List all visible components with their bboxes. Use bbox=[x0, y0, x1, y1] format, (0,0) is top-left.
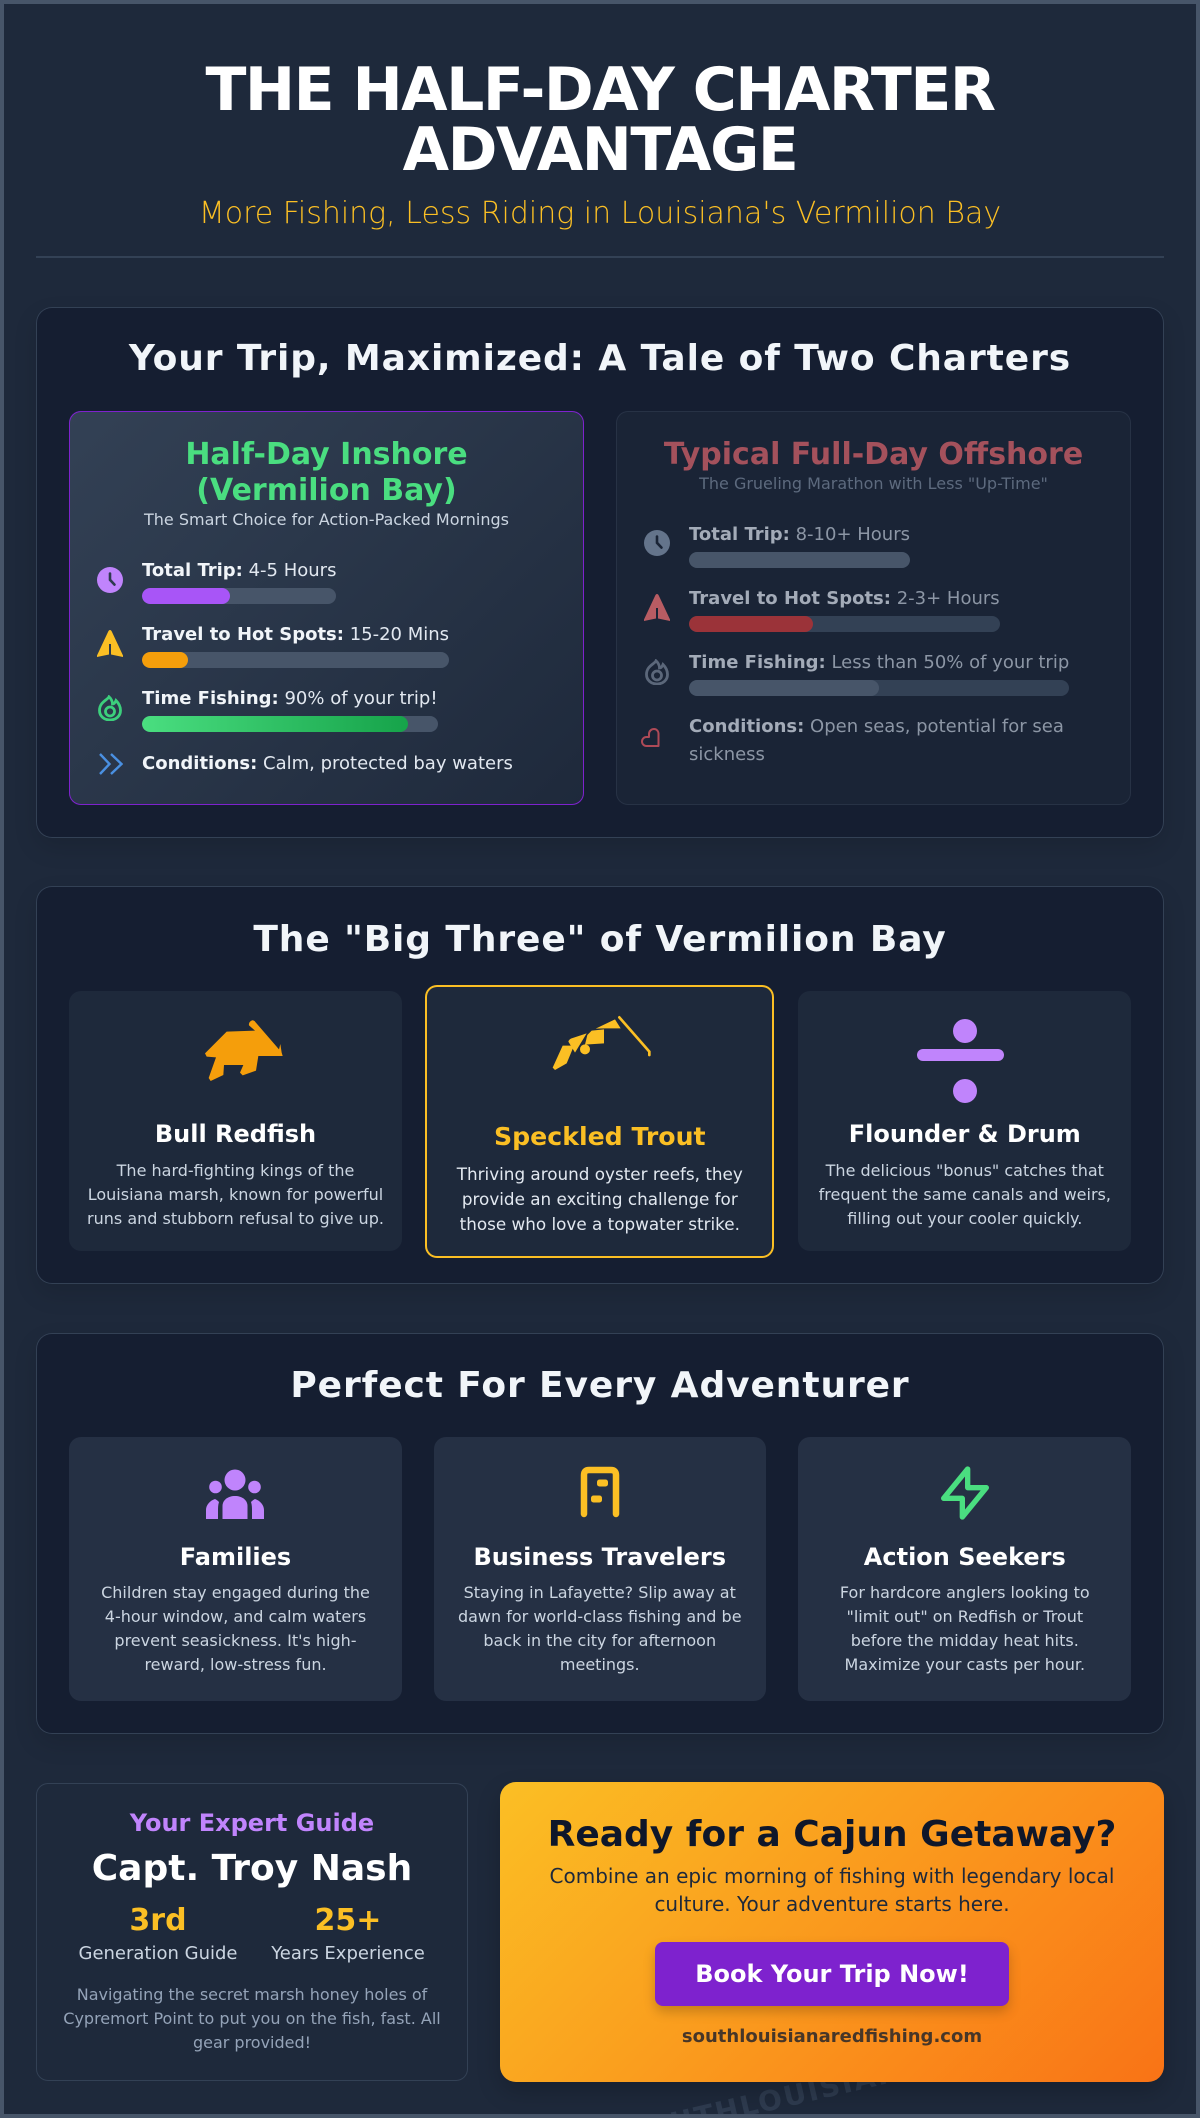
card text bbox=[101, 1583, 370, 1674]
progress bar bbox=[142, 716, 438, 732]
card text: before the midday heat hits. bbox=[851, 1631, 1079, 1650]
panel: a tale of two charters bbox=[36, 307, 1164, 838]
row: time fishing bbox=[645, 652, 1069, 696]
row: conditions bbox=[641, 716, 1064, 765]
card subtitle: The Grueling Marathon with Less "Up-Time" bbox=[699, 474, 1048, 493]
stat value: 3rd bbox=[129, 1903, 187, 1938]
title: ADVANTAGE bbox=[403, 115, 797, 185]
guide text: Navigating the secret marsh honey holes of bbox=[77, 1985, 427, 2004]
section heading: The "Big Three" of Vermilion Bay bbox=[253, 919, 947, 960]
card text: 4-hour window, and calm waters bbox=[105, 1607, 366, 1626]
card text: Louisiana marsh, known for powerful bbox=[88, 1185, 383, 1204]
card: full-day offshore bbox=[616, 411, 1131, 805]
card text: frequent the same canals and weirs, bbox=[819, 1185, 1111, 1204]
card subtitle: The Smart Choice for Action-Packed Mornings bbox=[144, 510, 509, 529]
icon: arrow bbox=[644, 594, 670, 621]
title: THE HALF-DAY CHARTER bbox=[205, 55, 995, 125]
card: speckled trout bbox=[425, 984, 774, 1258]
icon: divide bbox=[917, 1019, 1004, 1103]
card title: Action Seekers bbox=[864, 1543, 1066, 1571]
header bbox=[36, 55, 1164, 258]
card text: reward, low-stress fun. bbox=[144, 1655, 327, 1674]
card: action seekers bbox=[798, 1437, 1131, 1701]
card title: Typical Full-Day Offshore bbox=[664, 436, 1083, 472]
card text bbox=[458, 1583, 742, 1674]
card title: Bull Redfish bbox=[155, 1120, 316, 1148]
panel: perfect for every adventurer bbox=[36, 1333, 1164, 1734]
card title: Business Travelers bbox=[474, 1543, 726, 1571]
guide name: Capt. Troy Nash bbox=[92, 1848, 412, 1888]
card text: "limit out" on Redfish or Trout bbox=[846, 1607, 1083, 1626]
panel: call to action bbox=[500, 1782, 1164, 2082]
card text: prevent seasickness. It's high- bbox=[114, 1631, 357, 1650]
card title: Speckled Trout bbox=[494, 1122, 706, 1151]
icon: clock bbox=[97, 567, 123, 593]
guide text bbox=[36, 1983, 468, 2055]
card title bbox=[185, 436, 468, 508]
label: Conditions: Open seas, potential for sea sickness bbox=[689, 716, 1064, 765]
card text: filling out your cooler quickly. bbox=[847, 1209, 1082, 1228]
card title: (Vermilion Bay) bbox=[196, 472, 457, 508]
section heading: Perfect For Every Adventurer bbox=[290, 1365, 910, 1406]
row: travel bbox=[97, 624, 449, 668]
progress bar bbox=[689, 552, 910, 568]
card: half-day inshore bbox=[69, 411, 584, 805]
card text: The hard-fighting kings of the bbox=[117, 1161, 354, 1180]
icon: people bbox=[206, 1470, 264, 1519]
icon: trout bbox=[552, 1016, 651, 1070]
icon: heart bbox=[641, 728, 660, 747]
card text: back in the city for afternoon bbox=[483, 1631, 716, 1650]
stat label: Generation Guide bbox=[78, 1943, 238, 1964]
cta text: culture. Your adventure starts here. bbox=[654, 1892, 1010, 1916]
card text: Thriving around oyster reefs, they bbox=[457, 1164, 743, 1184]
stat label: Years Experience bbox=[271, 1943, 425, 1964]
panel: big three bbox=[36, 886, 1164, 1284]
card text: meetings. bbox=[560, 1655, 640, 1674]
card text: runs and stubborn refusal to give up. bbox=[87, 1209, 384, 1228]
row: total trip bbox=[644, 524, 910, 568]
card text: Maximize your casts per hour. bbox=[845, 1655, 1085, 1674]
card: flounder and drum bbox=[798, 991, 1131, 1251]
label: Travel to Hot Spots: 15-20 Mins bbox=[142, 624, 449, 645]
card text: dawn for world-class fishing and be bbox=[458, 1607, 742, 1626]
stat: generation bbox=[58, 1903, 258, 1968]
subtitle: More Fishing, Less Riding in Louisiana's Vermilion Bay bbox=[199, 196, 1001, 231]
icon: flame bbox=[98, 695, 122, 721]
card text bbox=[840, 1583, 1090, 1674]
stat: years bbox=[248, 1903, 448, 1968]
progress bar bbox=[689, 616, 1000, 632]
guide text: gear provided! bbox=[193, 2033, 311, 2052]
button: Book Your Trip Now! bbox=[695, 1960, 969, 1988]
card title: Families bbox=[180, 1543, 291, 1571]
card text bbox=[819, 1161, 1111, 1228]
label: Total Trip: 4-5 Hours bbox=[142, 560, 336, 581]
progress bar bbox=[689, 680, 1069, 696]
card text bbox=[87, 1161, 384, 1228]
icon: lightning bolt bbox=[941, 1466, 989, 1520]
progress bar bbox=[142, 588, 336, 604]
card text: those who love a topwater strike. bbox=[460, 1214, 740, 1234]
card text bbox=[456, 1164, 743, 1234]
card text: provide an exciting challenge for bbox=[462, 1189, 738, 1209]
label: Time Fishing: 90% of your trip! bbox=[142, 688, 438, 709]
card: bull redfish bbox=[69, 991, 402, 1251]
label: Travel to Hot Spots: 2-3+ Hours bbox=[689, 588, 1000, 609]
icon: chevrons bbox=[99, 753, 123, 775]
stat value: 25+ bbox=[315, 1903, 381, 1938]
label: Conditions: Calm, protected bay waters bbox=[142, 753, 513, 774]
label: Total Trip: 8-10+ Hours bbox=[689, 524, 910, 545]
header rule bbox=[36, 256, 1164, 258]
progress bar bbox=[142, 652, 449, 668]
icon: clock bbox=[644, 530, 670, 556]
icon: arrow bbox=[97, 630, 123, 657]
label: Time Fishing: Less than 50% of your trip bbox=[689, 652, 1069, 673]
row: conditions bbox=[99, 753, 513, 775]
icon: flame bbox=[645, 659, 669, 685]
section heading: Your Trip, Maximized: A Tale of Two Charters bbox=[129, 338, 1071, 379]
icon: building bbox=[580, 1466, 620, 1518]
cta text bbox=[500, 1862, 1164, 1918]
card text: For hardcore anglers looking to bbox=[840, 1583, 1090, 1602]
cta text: Combine an epic morning of fishing with legendary local bbox=[550, 1864, 1114, 1888]
panel: expert guide bbox=[36, 1783, 468, 2081]
row: total trip bbox=[97, 560, 336, 604]
card title: Flounder & Drum bbox=[849, 1120, 1081, 1148]
card text: Staying in Lafayette? Slip away at bbox=[464, 1583, 736, 1602]
card text: Children stay engaged during the bbox=[101, 1583, 370, 1602]
row: time fishing bbox=[98, 688, 438, 732]
cta heading: Ready for a Cajun Getaway? bbox=[548, 1814, 1116, 1854]
card title: Half-Day Inshore bbox=[185, 436, 468, 472]
card: business travelers bbox=[434, 1437, 766, 1701]
guide text: Cypremort Point to put you on the fish, fast. All bbox=[63, 2009, 441, 2028]
row: travel bbox=[644, 588, 1000, 632]
title bbox=[205, 55, 995, 185]
button bbox=[655, 1942, 1009, 2006]
icon: redfish bbox=[205, 1020, 283, 1081]
website: southlouisianaredfishing.com bbox=[682, 2026, 982, 2047]
card: families bbox=[69, 1437, 402, 1701]
guide label: Your Expert Guide bbox=[130, 1809, 374, 1837]
card text: The delicious "bonus" catches that bbox=[826, 1161, 1104, 1180]
